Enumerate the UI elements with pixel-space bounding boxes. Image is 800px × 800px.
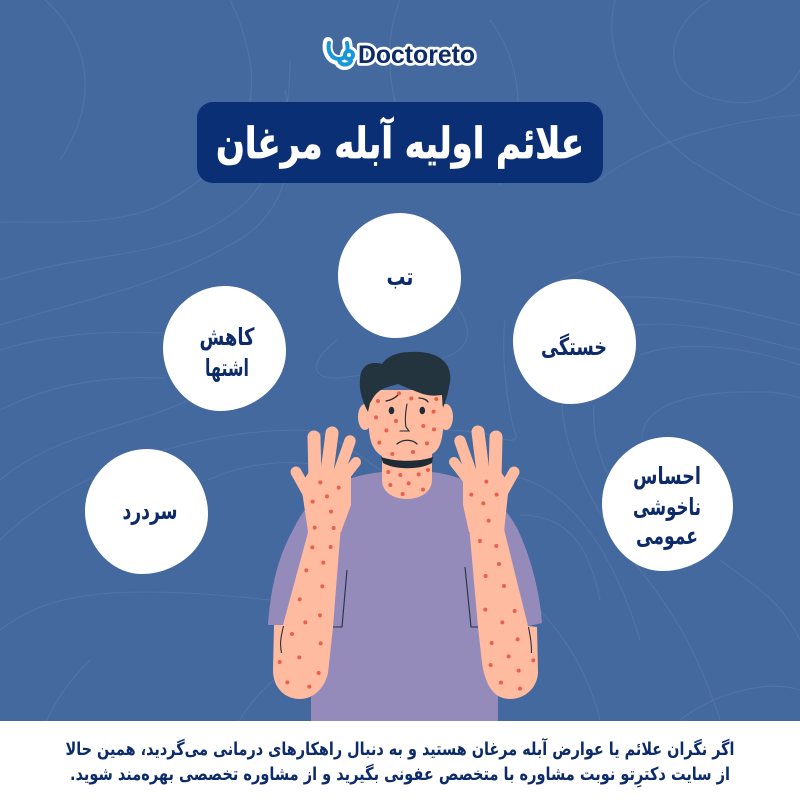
rash spots forearms [278,539,535,691]
symptom bubble: general malaise: احساس [633,462,701,490]
symptom bubble: general malaise [602,437,733,571]
symptom bubble: headache [85,449,208,574]
illustration: man with chickenpox rash [268,352,542,722]
symptom bubble: headache: سردرد [122,497,178,525]
symptom bubble: general malaise: ناخوشی [633,493,701,521]
footer panel [0,721,800,800]
symptom bubble: loss of appetite: اشتها [205,354,249,382]
left arm [273,525,341,699]
symptom bubble: loss of appetite [163,286,286,411]
logo: Doctoreto [328,41,475,69]
right arm [469,525,538,699]
shirt [268,472,542,722]
hair [360,352,450,412]
logo wordmark: Doctoreto [358,41,475,69]
right hand [454,432,514,532]
neck [382,450,432,499]
neck shadow [381,457,433,468]
title text: علائم اولیه آبله مرغان [216,117,584,169]
title banner [197,102,603,183]
symptom bubble: fever [338,213,461,338]
left hand [296,433,356,532]
symptom bubble: fever: تب [386,263,414,291]
symptom bubble: general malaise: عمومی [636,522,698,550]
facial features [386,395,428,444]
symptom bubble: fatigue [513,279,636,404]
rash spots upper body [311,391,499,530]
sleeve and pocket lines [281,567,532,653]
ears [358,404,372,430]
symptom bubble: fatigue: خستگی [541,333,607,361]
icon: stethoscope [328,42,353,65]
symptom bubble: loss of appetite: کاهش [200,323,255,351]
face [369,390,443,460]
